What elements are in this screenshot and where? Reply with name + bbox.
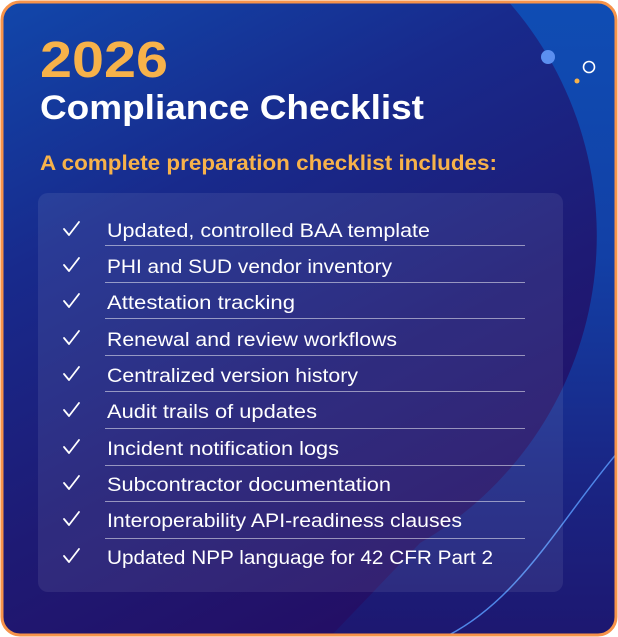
- title year: 2026: [40, 31, 168, 88]
- checklist items: Updated NPP language for 42 CFR Part 2: [107, 548, 493, 569]
- checklist items: Centralized version history: [107, 366, 359, 387]
- checklist items: Interoperability API-readiness clauses: [107, 511, 462, 532]
- checklist items: Audit trails of updates: [107, 402, 317, 423]
- checklist items: Incident notification logs: [107, 439, 339, 460]
- checklist items: Updated, controlled BAA template: [107, 221, 430, 242]
- checklist items: PHI and SUD vendor inventory: [107, 257, 393, 278]
- checklist items: Attestation tracking: [107, 293, 295, 314]
- checklist items: [107, 221, 493, 569]
- check icons: [64, 222, 79, 562]
- subtitle: A complete preparation checklist includes:: [40, 152, 497, 175]
- decorative dots: [541, 50, 594, 84]
- checklist items: Renewal and review workflows: [107, 330, 397, 351]
- checklist items: Subcontractor documentation: [107, 475, 391, 496]
- panel: checklist: [38, 193, 563, 592]
- title: Compliance Checklist: [40, 89, 424, 127]
